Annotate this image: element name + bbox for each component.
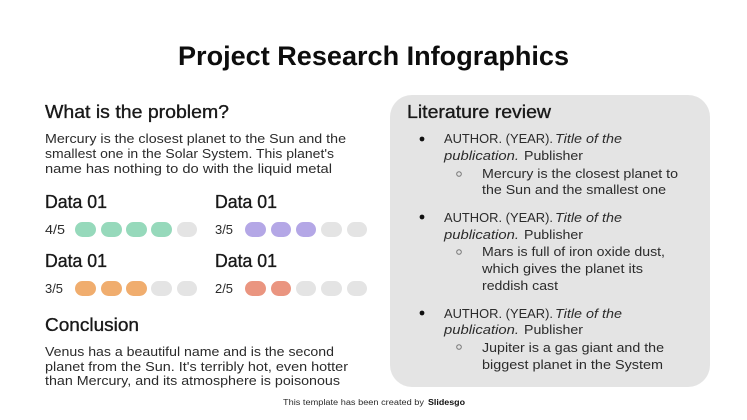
title: Project Research Infographics: [178, 41, 569, 71]
reference 2: reddish cast: [482, 278, 558, 293]
rating: data 01 purple 3/5: [215, 192, 367, 237]
rating: data 01 green 4/5: Data 01: [45, 192, 107, 212]
rating: data 01 green 4/5: [45, 192, 197, 237]
reference 1: Title of the: [555, 131, 622, 146]
footer credit: [283, 398, 465, 407]
text block: problem description: Mercury is the closest planet to the Sun and the: [45, 131, 346, 146]
reference 2: AUTHOR. (YEAR).: [444, 210, 553, 225]
footer credit: Slidesgo: [428, 398, 465, 407]
reference 2: [420, 210, 665, 293]
reference 2: publication.: [443, 227, 519, 242]
reference 1: publication.: [443, 148, 519, 163]
rating: data 01 orange 3/5: Data 01: [45, 251, 107, 271]
reference 2: which gives the planet its: [481, 261, 644, 276]
rating: data 01 purple 3/5: 3/5: [215, 222, 233, 237]
reference 3: [420, 306, 664, 372]
reference 3: Title of the: [555, 306, 622, 321]
rating: data 01 purple 3/5: Data 01: [215, 192, 277, 212]
footer credit: This template has been created by: [283, 398, 424, 407]
rating: data 01 red 2/5: Data 01: [215, 251, 277, 271]
reference 1: Publisher: [524, 148, 584, 163]
heading: literature review: Literature review: [407, 102, 552, 122]
rating: data 01 green 4/5: 4/5: [45, 222, 65, 237]
text block: conclusion description: [45, 344, 349, 388]
reference 2: Title of the: [555, 210, 622, 225]
heading: conclusion: Conclusion: [45, 315, 139, 335]
text block: conclusion description: planet from the Sun. It's terribly hot, even hotter: [45, 359, 349, 374]
rating: data 01 red 2/5: 2/5: [215, 281, 233, 296]
text block: problem description: smallest one in the Solar System. This planet's: [45, 146, 335, 161]
reference 2: Publisher: [524, 227, 584, 242]
reference 1: AUTHOR. (YEAR).: [444, 131, 553, 146]
rating: data 01 red 2/5: [215, 251, 367, 296]
panel: conclusion: [45, 315, 349, 388]
reference 3: publication.: [443, 322, 519, 337]
reference 1: the Sun and the smallest one: [482, 182, 666, 197]
reference 3: biggest planet in the System: [482, 357, 663, 372]
reference 3: AUTHOR. (YEAR).: [444, 306, 553, 321]
text block: conclusion description: than Mercury, and its atmosphere is poisonous: [45, 373, 341, 388]
rating: data 01 orange 3/5: [45, 251, 197, 296]
heading: what is the problem: What is the problem?: [45, 102, 229, 122]
reference 1: [420, 131, 678, 197]
rating: data 01 orange 3/5: 3/5: [45, 281, 63, 296]
panel: problem statement: [45, 102, 346, 176]
reference 3: Jupiter is a gas giant and the: [482, 340, 664, 355]
panel: literature review: [390, 95, 710, 387]
text block: problem description: [45, 131, 346, 176]
reference 3: Publisher: [524, 322, 584, 337]
text block: conclusion description: Venus has a beautiful name and is the second: [45, 344, 334, 359]
text block: problem description: name has nothing to do with the liquid metal: [45, 161, 332, 176]
reference 2: Mars is full of iron oxide dust,: [482, 244, 665, 259]
reference 1: Mercury is the closest planet to: [482, 166, 678, 181]
